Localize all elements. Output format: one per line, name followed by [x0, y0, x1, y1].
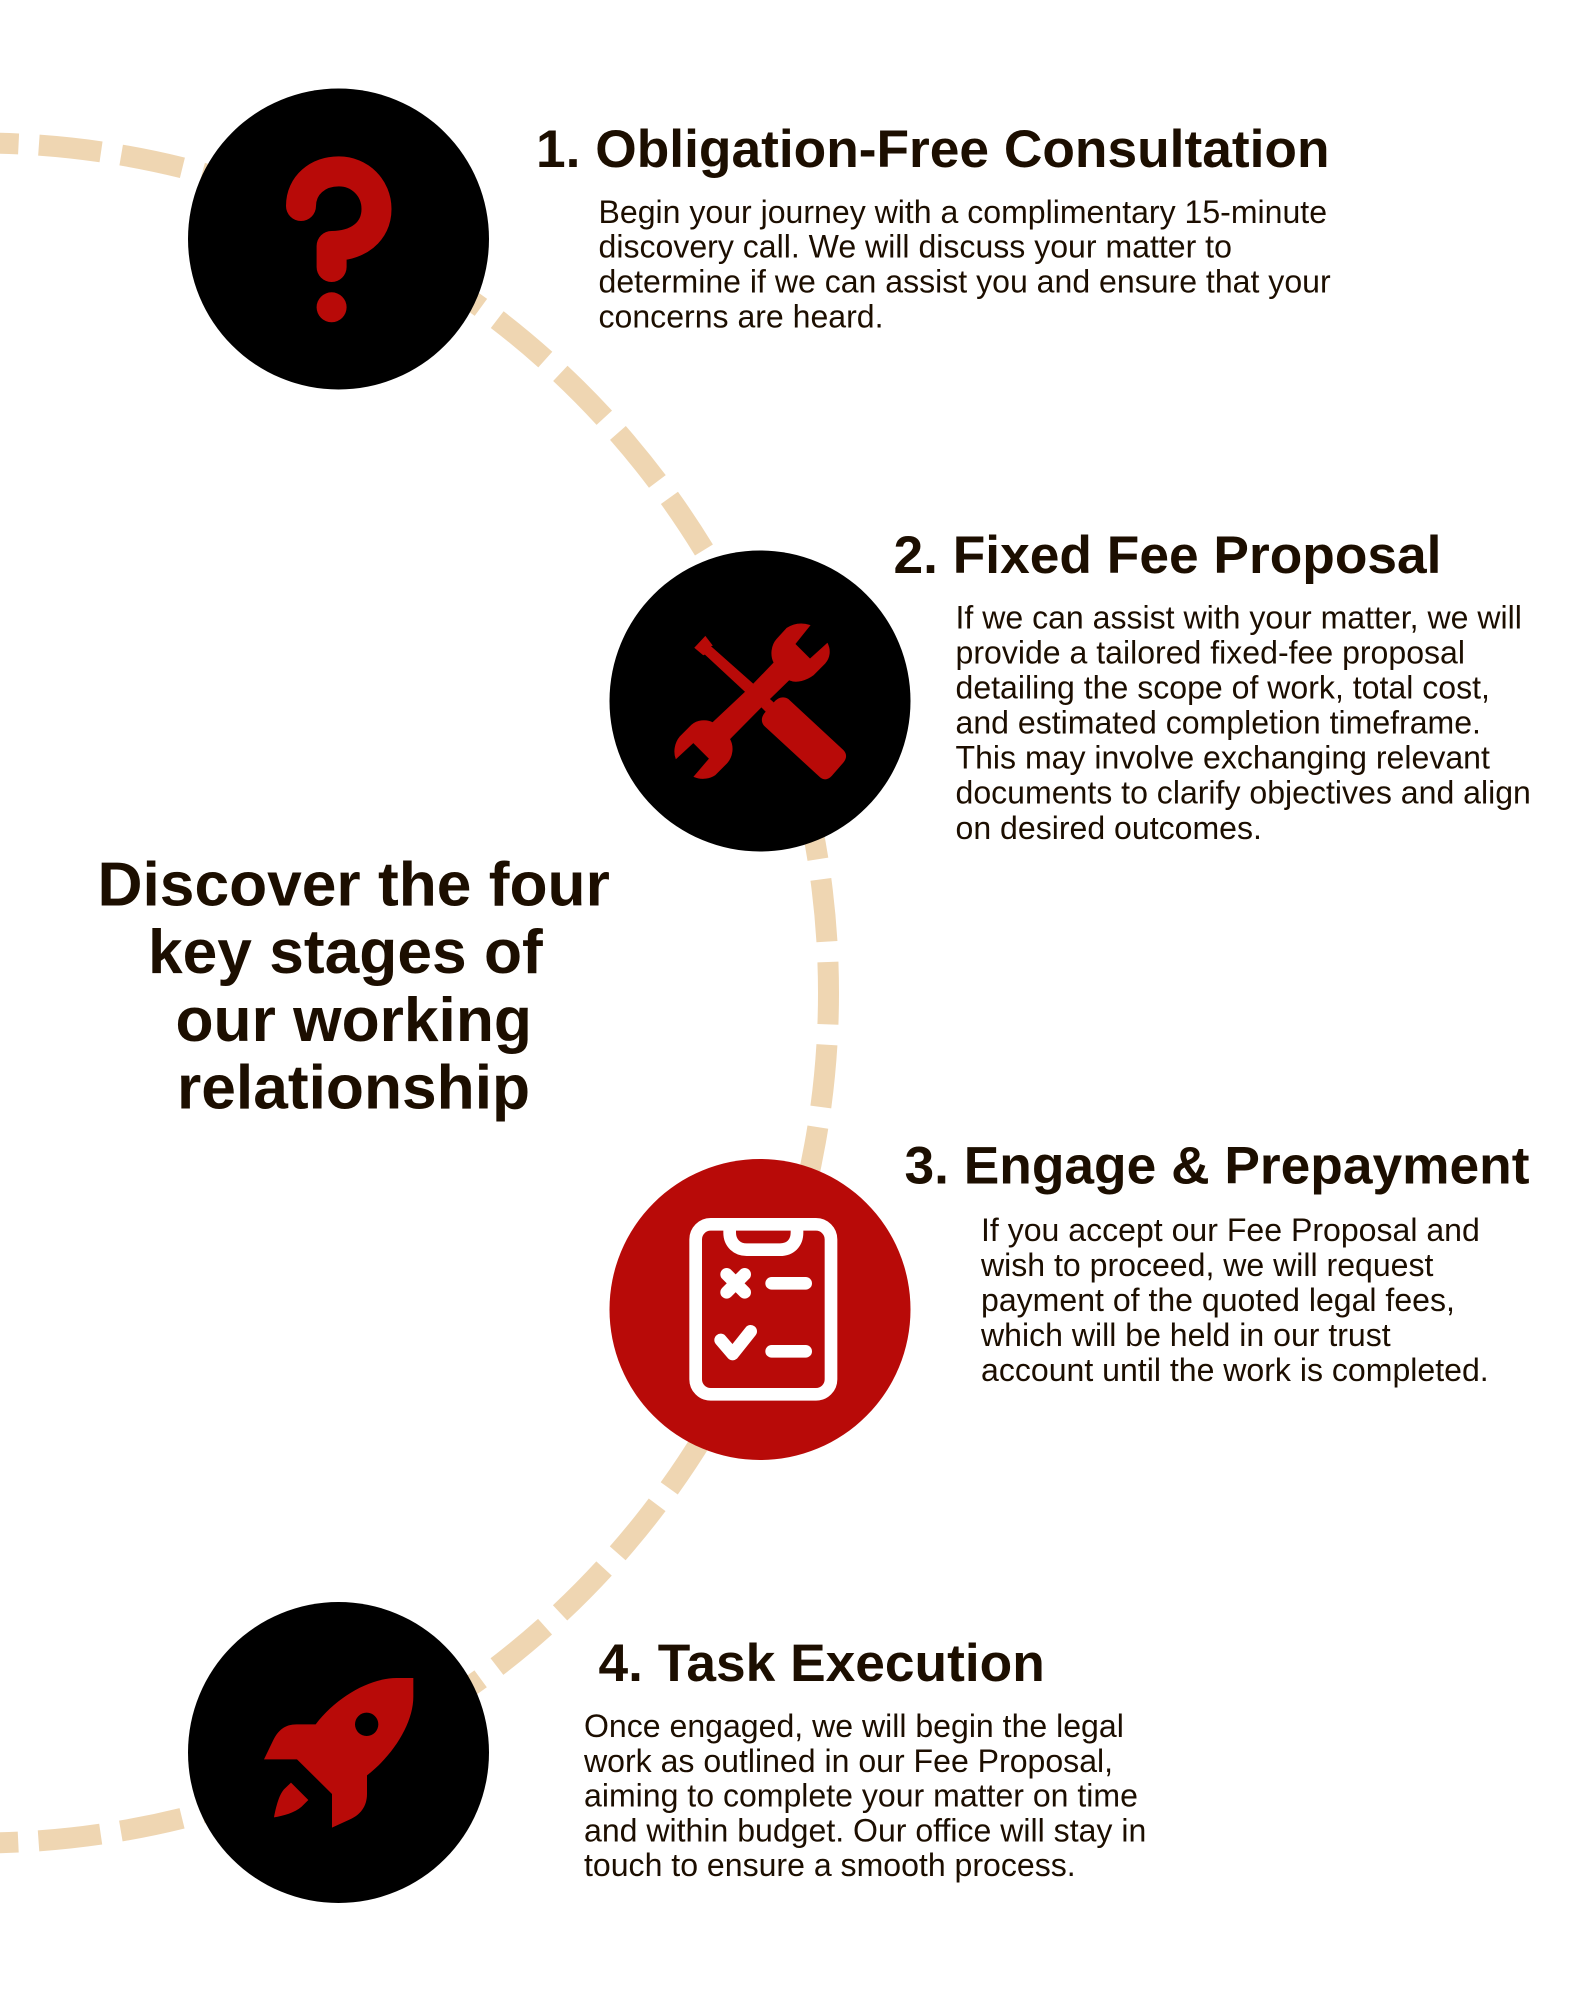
stage 3 description: wish to proceed, we will request — [980, 1247, 1434, 1283]
stage 4 description: work as outlined in our Fee Proposal, — [583, 1743, 1113, 1779]
central title: relationship — [177, 1054, 530, 1122]
stage 1 description — [598, 194, 1331, 334]
stage 4 description: Once engaged, we will begin the legal — [584, 1708, 1124, 1744]
stage 3 description: If you accept our Fee Proposal and — [981, 1212, 1480, 1248]
stage 2 icon: crossed wrench and screwdriver in black circle — [610, 550, 910, 852]
stage 4 icon: rocket in black circle — [188, 1602, 489, 1903]
stage 4 description: touch to ensure a smooth process. — [584, 1847, 1076, 1883]
stage 2 description: provide a tailored fixed-fee proposal — [956, 634, 1465, 670]
central title: our working — [176, 986, 532, 1055]
stage 3 description — [980, 1212, 1489, 1388]
stage 2 description: documents to clarify objectives and align — [956, 775, 1531, 811]
stage 2 description: detailing the scope of work, total cost, — [956, 670, 1490, 706]
dashed arc connecting the stages — [0, 143, 828, 1843]
central title: Discover the four — [98, 850, 610, 919]
stage 3 heading: 3. Engage & Prepayment — [904, 1136, 1530, 1195]
stage 4 description: and within budget. Our office will stay in — [584, 1812, 1146, 1848]
stage 3 description: account until the work is completed. — [981, 1352, 1489, 1388]
stage 3 description: payment of the quoted legal fees, — [981, 1282, 1455, 1318]
stage 1 description: Begin your journey with a complimentary 15-minute — [598, 194, 1327, 230]
stage 1 heading: 1. Obligation-Free Consultation — [536, 120, 1330, 179]
central title: key stages of — [148, 918, 543, 987]
stage 2 description: If we can assist with your matter, we will — [956, 600, 1522, 636]
stage 4 description: aiming to complete your matter on time — [584, 1778, 1138, 1814]
stage 2 description: and estimated completion timeframe. — [956, 705, 1481, 741]
stage 1 description: discovery call. We will discuss your matter to — [598, 229, 1232, 265]
stage 2 description: on desired outcomes. — [956, 810, 1262, 846]
stage 4 heading: 4. Task Execution — [598, 1634, 1045, 1693]
stage 1 icon: question mark in black circle — [188, 88, 489, 390]
stage 2 description: This may involve exchanging relevant — [956, 740, 1490, 776]
stage 3 description: which will be held in our trust — [980, 1317, 1391, 1353]
stage 1 description: determine if we can assist you and ensure that your — [598, 264, 1331, 300]
stage 4 description — [583, 1708, 1146, 1883]
stage 2 description — [956, 600, 1531, 846]
stage 1 description: concerns are heard. — [598, 298, 884, 334]
central title — [98, 850, 610, 1122]
stage 3 icon: checklist clipboard in red circle — [610, 1159, 910, 1460]
stage 2 heading: 2. Fixed Fee Proposal — [894, 526, 1441, 585]
